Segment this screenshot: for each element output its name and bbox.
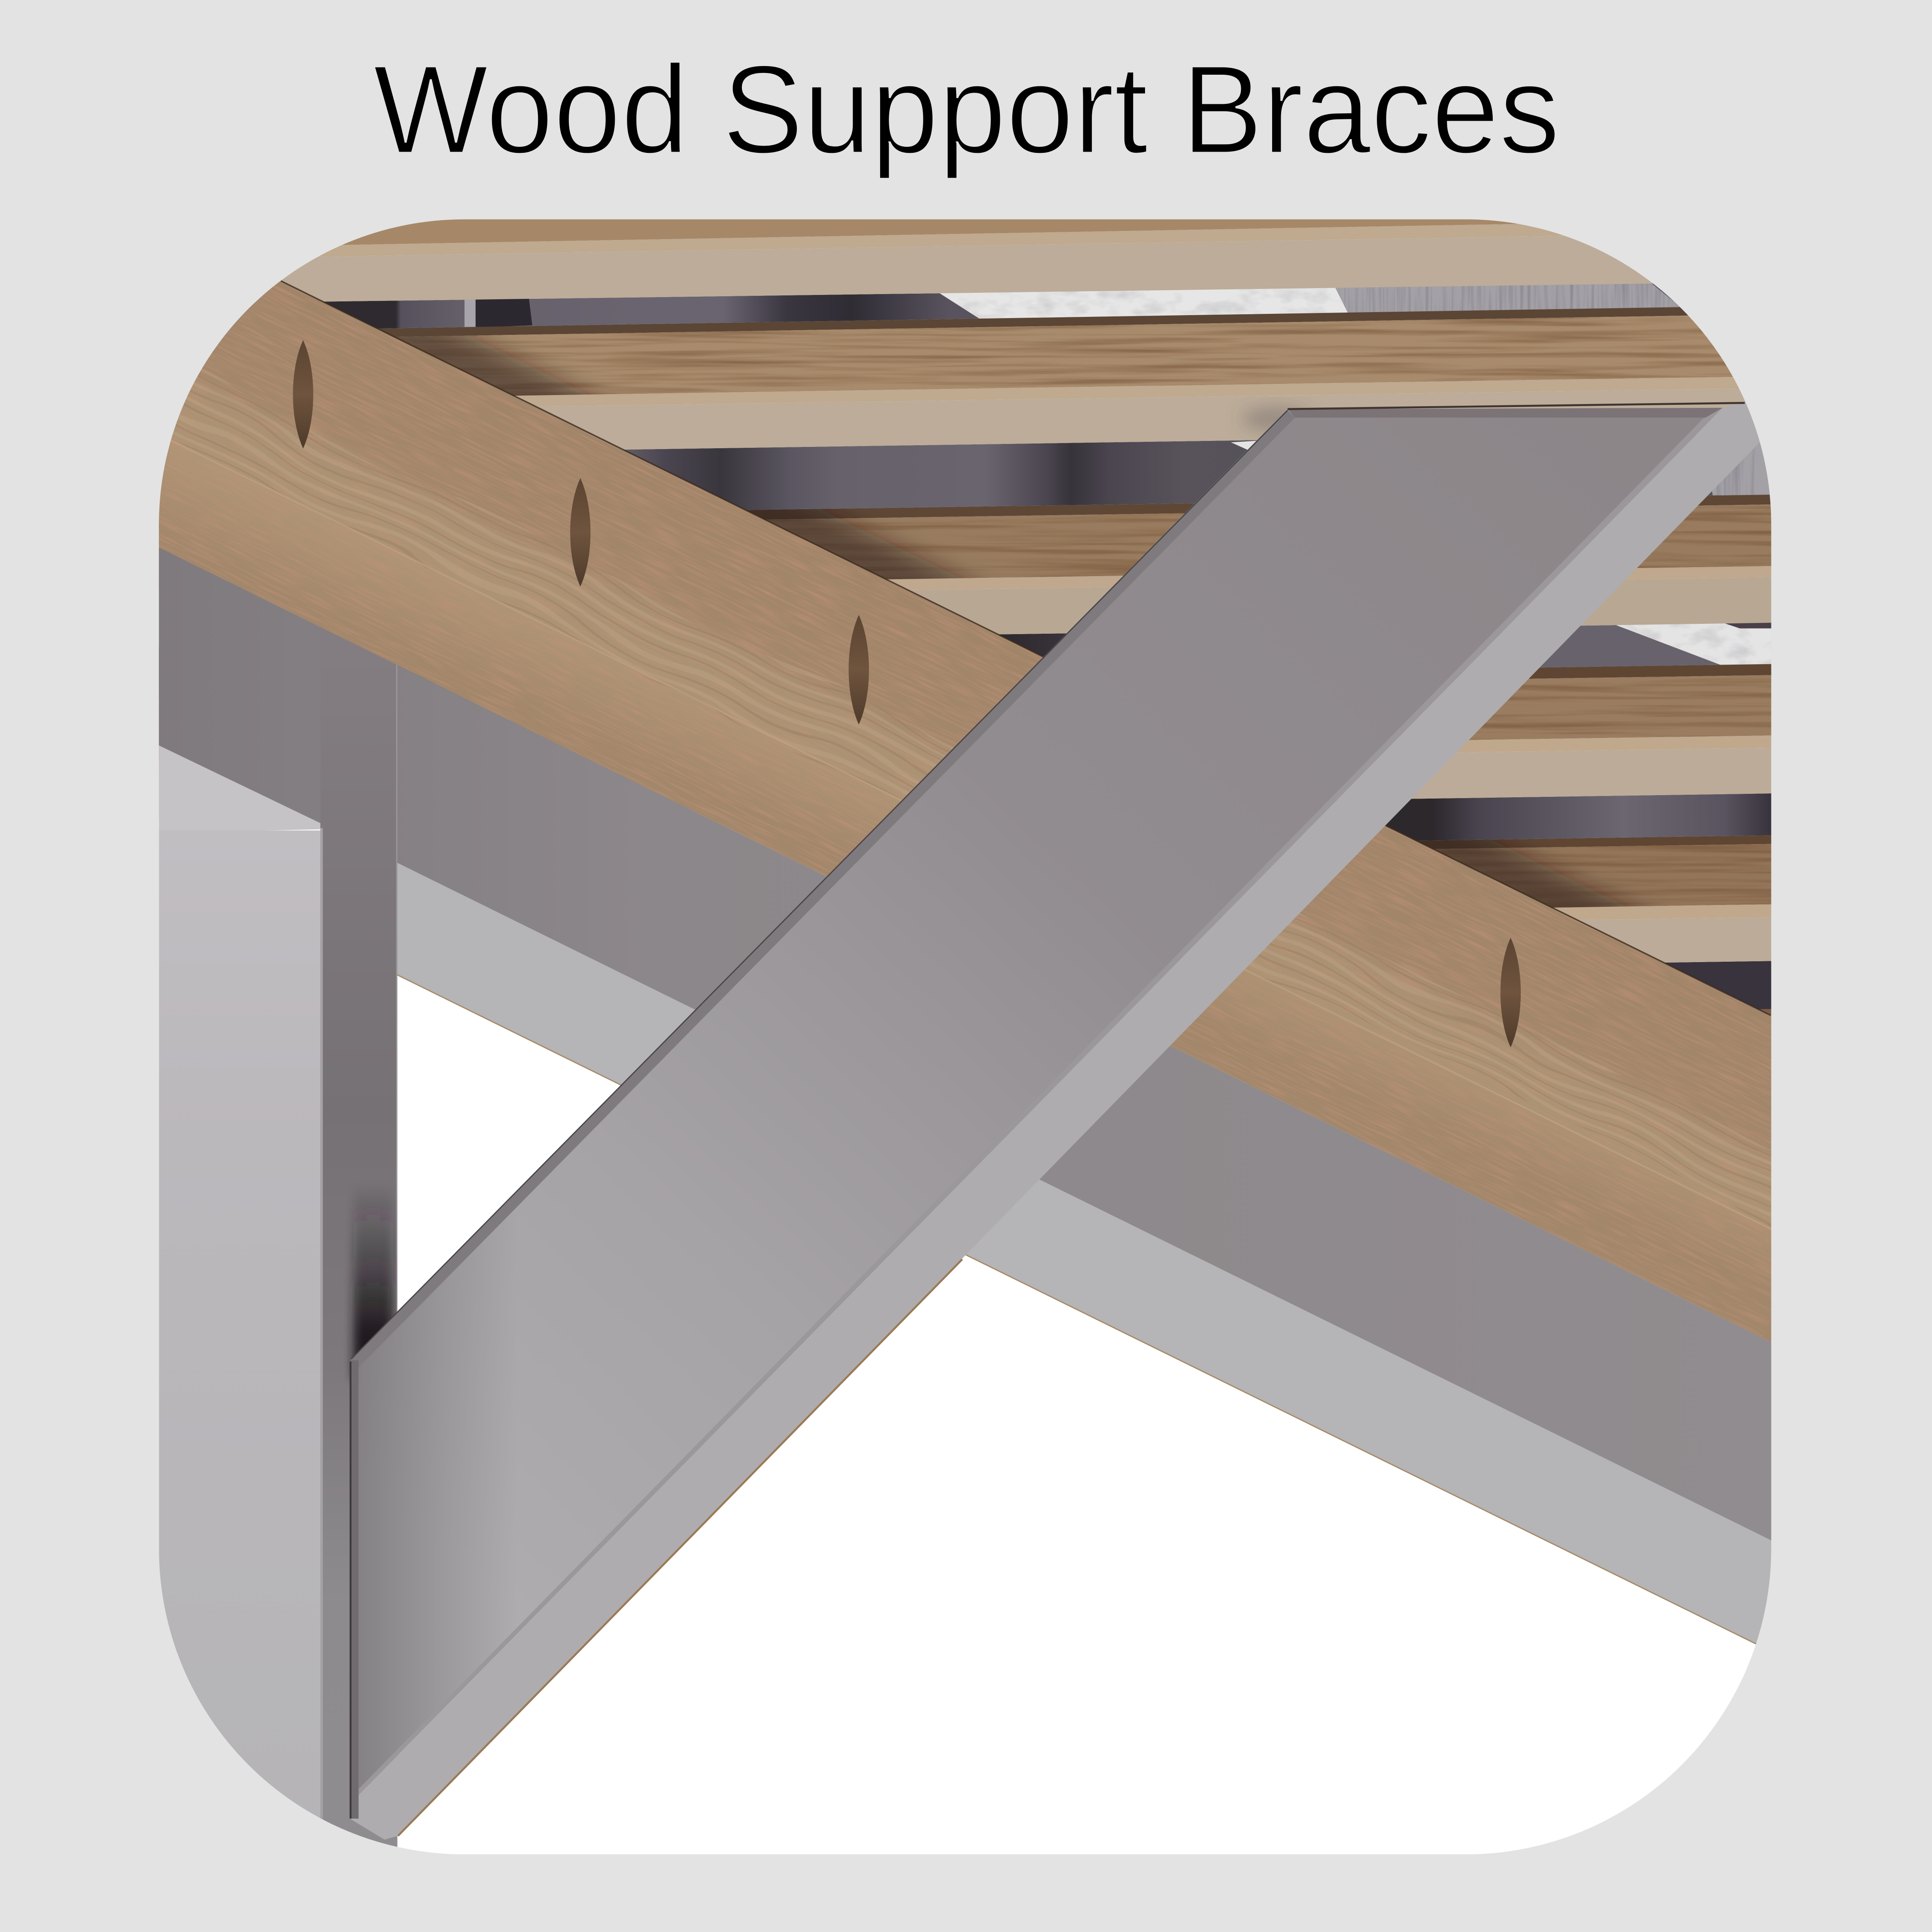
wood rail beam — [0, 204, 1892, 1380]
brace left bevel — [351, 410, 1295, 1368]
slat 4 — [123, 663, 1848, 818]
dowel hole 3 — [849, 615, 869, 725]
dowel hole 4 — [1501, 938, 1521, 1047]
diagonal support brace — [350, 402, 1823, 1840]
leg block front face — [159, 830, 322, 1863]
brace light edge strip — [350, 402, 1823, 1840]
wood top edge line — [281, 281, 1771, 1015]
slat 3 — [123, 493, 1848, 647]
panel: rounded close-up view of bed frame — [159, 219, 1771, 1854]
vertical post — [320, 616, 398, 1861]
wood beam lower face — [123, 417, 1848, 1380]
brace vertical edge — [350, 1360, 358, 1819]
shadow cast by wood rail onto brown slat faces — [123, 197, 1848, 1047]
brace top bevel — [1288, 408, 1722, 418]
wood grain texture — [0, 204, 1892, 1340]
shadow on post behind brace — [354, 1183, 393, 1380]
dowel hole 1 — [293, 340, 313, 449]
brace face shading — [351, 1170, 524, 1811]
infographic canvas — [159, 63, 1771, 1854]
dowel hole 2 — [570, 478, 590, 586]
rail underside edge line — [397, 975, 1771, 1651]
wood beam side face — [123, 204, 1848, 1267]
brace dark diagonal outline — [351, 410, 1288, 1359]
grey side rail — [123, 530, 1848, 1578]
light triangle left of post — [159, 745, 323, 833]
light underside of side rail — [397, 863, 1848, 1689]
brace dark vertical outline — [350, 1361, 351, 1819]
slat wood grain — [123, 313, 1848, 916]
brace cut wood edge — [398, 1259, 962, 1836]
title: Wood Support Braces — [374, 39, 1560, 180]
brace contact shadow on slat 2 — [1242, 408, 1311, 430]
slat 5 — [986, 834, 1848, 1068]
brace top outline — [1288, 403, 1745, 409]
brace base bevel — [351, 408, 1722, 1811]
brace main face — [358, 418, 1704, 1789]
slat 2 — [123, 304, 1848, 457]
slat 1 — [255, 219, 1653, 302]
gaps between slats with mattress underside — [123, 281, 1848, 1035]
